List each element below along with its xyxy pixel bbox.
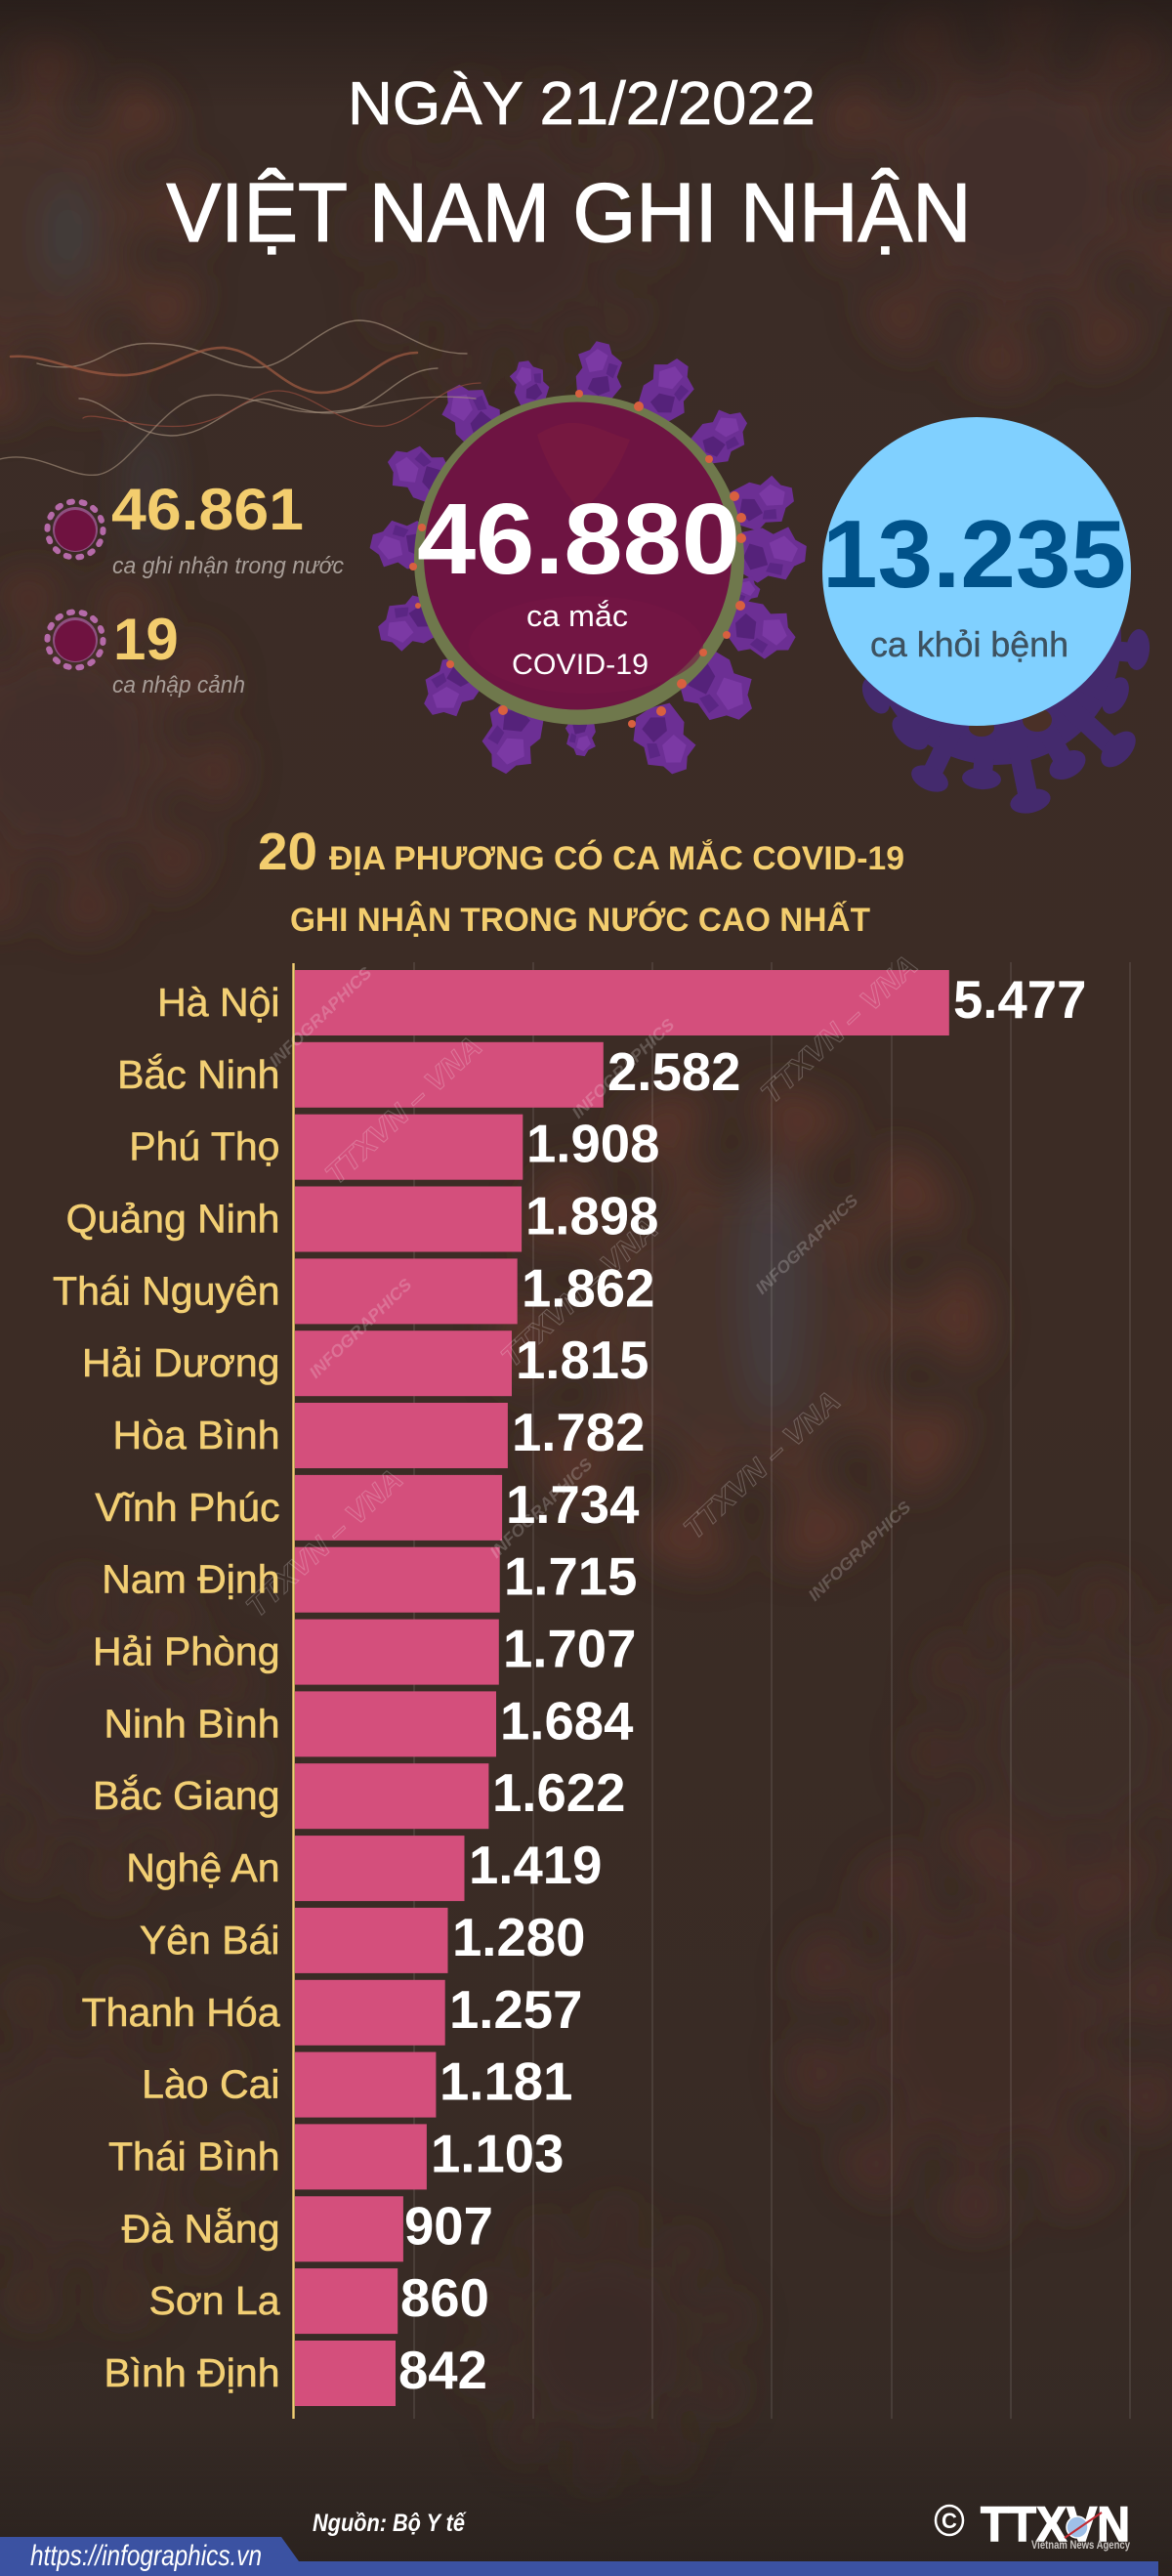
bars <box>295 970 949 2406</box>
bar values: 1.707 <box>503 1620 636 1679</box>
bar values: 1.782 <box>512 1403 645 1462</box>
watermarks: INFOGRAPHICS <box>306 1275 416 1382</box>
blue circle <box>822 417 1131 726</box>
bar values: 1.898 <box>525 1186 658 1246</box>
recovered panel <box>822 417 1151 817</box>
locality labels: Nghệ An <box>126 1845 279 1890</box>
bar values: 1.908 <box>526 1115 659 1174</box>
chart heading: ĐỊA PHƯƠNG CÓ CA MẮC COVID-19 <box>329 840 904 877</box>
locality labels: Quảng Ninh <box>66 1196 279 1241</box>
watermarks: TTXVN – VNA <box>495 1213 664 1373</box>
chart heading: GHI NHẬN TRONG NƯỚC CAO NHẤT <box>290 902 870 939</box>
locality labels: Đà Nẵng <box>122 2206 279 2251</box>
number: 19: 19 <box>113 607 179 672</box>
locality labels: Vĩnh Phúc <box>95 1485 279 1530</box>
locality labels <box>53 980 280 2395</box>
bar values: 1.257 <box>449 1980 582 2040</box>
locality labels: Bắc Ninh <box>117 1052 279 1097</box>
bar values: 5.477 <box>953 970 1086 1030</box>
locality labels: Thái Bình <box>108 2133 279 2178</box>
chart heading: 20 <box>258 823 317 881</box>
bar chart: 20 localities <box>53 950 1130 2419</box>
caption: ca khỏi bệnh: ca khỏi bệnh <box>870 624 1068 664</box>
bar values: 1.862 <box>522 1258 654 1318</box>
locality labels: Yên Bái <box>140 1918 279 1963</box>
logo: TTXVN: C <box>942 2509 957 2533</box>
watermarks: TTXVN – VNA <box>240 1463 409 1624</box>
footer banner with url <box>0 2537 1158 2576</box>
title: main heading: VIỆT NAM GHI NHẬN <box>166 167 971 260</box>
icon: small virus <box>47 502 104 557</box>
watermarks: INFOGRAPHICS <box>805 1498 915 1605</box>
watermarks: INFOGRAPHICS <box>266 963 376 1071</box>
bar values: 1.815 <box>516 1330 649 1390</box>
virus spikes <box>368 339 808 784</box>
number: 46.880: 46.880 <box>417 483 740 595</box>
url text: https://infographics.vn <box>30 2540 262 2572</box>
bar values: 860 <box>400 2268 489 2328</box>
bar values: 1.684 <box>500 1691 634 1751</box>
watermarks: TTXVN – VNA <box>678 1385 847 1545</box>
locality labels: Thanh Hóa <box>82 1990 280 2035</box>
number: 46.861: 46.861 <box>111 477 304 542</box>
bar values <box>398 970 1086 2400</box>
watermarks: INFOGRAPHICS <box>568 1015 679 1122</box>
locality labels: Hải Dương <box>82 1340 279 1385</box>
bar values: 1.734 <box>506 1475 640 1535</box>
icon: small virus <box>47 612 104 668</box>
logo: TTXVN: TTXVN <box>981 2497 1130 2552</box>
locality labels: Thái Nguyên <box>53 1268 279 1313</box>
logo: TTXVN: Vietnam News Agency <box>1031 2538 1130 2552</box>
decorative wavy lines <box>0 320 481 475</box>
bar values: 1.715 <box>504 1547 637 1607</box>
watermarks: TTXVN – VNA <box>319 1031 488 1191</box>
locality labels: Bình Định <box>104 2350 279 2395</box>
caption: domestic: ca ghi nhận trong nước <box>112 553 344 579</box>
locality labels: Sơn La <box>148 2278 280 2323</box>
watermarks: TTXVN – VNA <box>755 950 924 1110</box>
main virus: total cases <box>368 339 808 784</box>
title: date line: NGÀY 21/2/2022 <box>348 70 816 138</box>
icon: purple virus behind circle <box>857 515 1151 817</box>
stat: domestic cases <box>47 477 344 579</box>
bar values: 842 <box>398 2341 487 2400</box>
locality labels: Bắc Giang <box>93 1773 279 1818</box>
locality labels: Nam Định <box>102 1557 279 1602</box>
caption: imported: ca nhập cảnh <box>112 672 245 698</box>
watermarks <box>240 950 924 1624</box>
source note: Nguồn: Bộ Y tế <box>313 2510 467 2537</box>
bar values: 2.582 <box>607 1042 740 1102</box>
locality labels: Phú Thọ <box>129 1124 279 1169</box>
caption: COVID-19: COVID-19 <box>512 649 649 681</box>
locality labels: Hòa Bình <box>113 1413 279 1457</box>
locality labels: Hải Phòng <box>93 1629 279 1674</box>
bar values: 907 <box>404 2196 493 2256</box>
bar values: 1.181 <box>440 2052 572 2112</box>
number: 13.235: 13.235 <box>822 500 1126 608</box>
locality labels: Hà Nội <box>157 980 279 1025</box>
bar values: 1.419 <box>469 1836 602 1895</box>
locality labels: Lào Cai <box>142 2062 279 2107</box>
bar values: 1.622 <box>492 1763 625 1823</box>
watermarks: INFOGRAPHICS <box>752 1191 862 1298</box>
chart heading <box>258 823 904 939</box>
bar values: 1.280 <box>452 1908 585 1967</box>
chart axis <box>292 963 295 2419</box>
caption: ca mắc: ca mắc <box>526 599 628 633</box>
watermarks: INFOGRAPHICS <box>486 1455 597 1562</box>
bar values: 1.103 <box>431 2124 564 2183</box>
virus body <box>409 390 746 728</box>
locality labels: Ninh Bình <box>104 1701 279 1746</box>
stat: imported cases <box>47 607 245 698</box>
